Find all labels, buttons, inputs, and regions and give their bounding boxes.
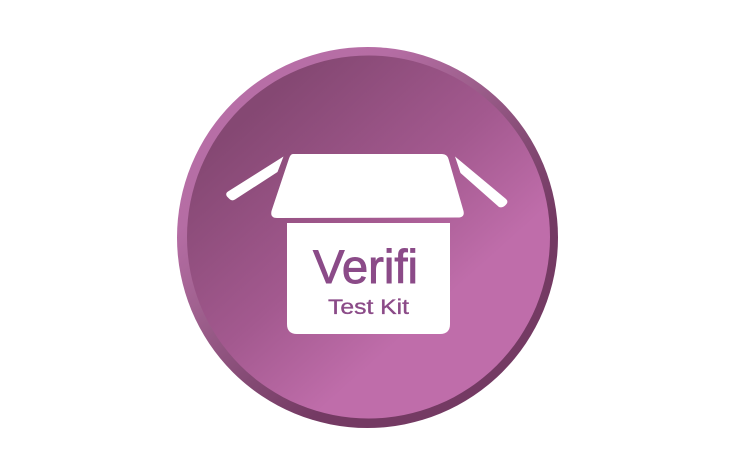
circle face <box>187 56 550 418</box>
box body label <box>287 223 450 334</box>
icon: open box <box>226 154 507 334</box>
product name: Verifi <box>313 240 418 293</box>
box lid <box>271 154 464 218</box>
circle rim <box>177 47 558 428</box>
product subtitle: Test Kit <box>328 296 409 319</box>
box right flap <box>455 156 507 207</box>
box left flap <box>226 156 284 200</box>
